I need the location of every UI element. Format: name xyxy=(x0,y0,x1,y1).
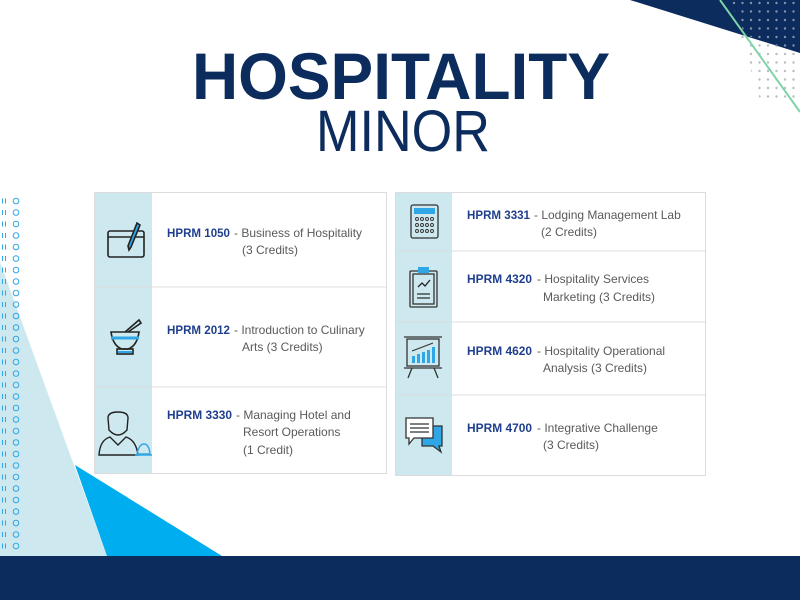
text: HPRM 3331: HPRM 3331 xyxy=(467,208,530,222)
title xyxy=(192,39,610,164)
text: HPRM 2012: HPRM 2012 xyxy=(167,323,230,337)
text: HPRM 1050: HPRM 1050 xyxy=(167,226,230,240)
text: HPRM 4700 xyxy=(467,421,658,452)
text: HPRM 1050 xyxy=(167,226,362,257)
title: HOSPITALITY xyxy=(192,39,610,113)
text: HPRM 3330: - Managing Hotel and xyxy=(236,408,351,422)
text: HPRM 3331: - Lodging Management Lab xyxy=(534,208,681,222)
text: HPRM 4320: - Hospitality Services xyxy=(537,272,649,286)
text: HPRM 4320: HPRM 4320 xyxy=(467,272,532,286)
text: HPRM 4620: Analysis (3 Credits) xyxy=(543,361,647,375)
icon: clipboard chart xyxy=(410,267,437,307)
text: HPRM 4700: - Integrative Challenge xyxy=(537,421,658,435)
title: MINOR xyxy=(316,99,490,164)
text: HPRM 3330: HPRM 3330 xyxy=(167,408,232,422)
text: HPRM 3330: Resort Operations xyxy=(243,425,340,439)
text: HPRM 1050: (3 Credits) xyxy=(242,243,298,257)
text: HPRM 4700: (3 Credits) xyxy=(543,438,599,452)
icon: chat bubbles xyxy=(406,418,442,452)
icon: calculator xyxy=(411,205,438,238)
panel: left courses xyxy=(94,192,386,474)
text: HPRM 3331 xyxy=(467,208,681,239)
text: HPRM 2012: - Introduction to Culinary xyxy=(234,323,365,337)
decoration: top-right navy triangle xyxy=(630,0,800,53)
text: HPRM 3330 xyxy=(167,408,351,457)
icon: concierge xyxy=(99,412,152,455)
text: HPRM 4320 xyxy=(467,272,655,304)
text: HPRM 2012 xyxy=(167,323,365,354)
text: HPRM 1050: - Business of Hospitality xyxy=(234,226,362,240)
text: HPRM 3330: (1 Credit) xyxy=(243,443,293,457)
text: HPRM 4620: - Hospitality Operational xyxy=(537,344,665,358)
text: HPRM 2012: Arts (3 Credits) xyxy=(242,340,323,354)
text: HPRM 4620 xyxy=(467,344,665,375)
icon: mortar and pestle xyxy=(111,320,141,354)
text: HPRM 4320: Marketing (3 Credits) xyxy=(543,290,655,304)
panel: right courses xyxy=(396,192,706,476)
text: HPRM 3331: (2 Credits) xyxy=(541,225,597,239)
text: HPRM 4700: HPRM 4700 xyxy=(467,421,532,435)
decoration: left light blue triangle xyxy=(0,262,107,556)
decoration: green line xyxy=(720,0,800,112)
icon: browser with pen xyxy=(108,223,144,257)
footer bar xyxy=(0,556,800,600)
icon: presentation board xyxy=(404,337,442,378)
text: HPRM 4620: HPRM 4620 xyxy=(467,344,532,358)
decoration: left dotted column xyxy=(0,195,22,553)
decoration: top-right dots xyxy=(730,0,800,100)
decoration: bright blue triangle xyxy=(75,465,222,556)
